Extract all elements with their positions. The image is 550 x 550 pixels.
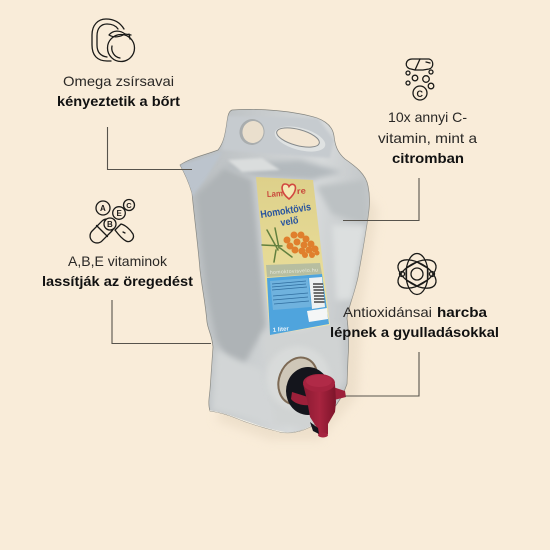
icon: vitamin pills: C (126, 201, 132, 210)
vitamin C bold line: citromban (392, 150, 464, 166)
vitamin text line: A,B,E vitaminok (68, 253, 168, 269)
antioxidant line 1: harcba (437, 304, 487, 320)
vitamin C line 2: vitamin, mint a (378, 130, 477, 146)
pouch body (180, 109, 369, 433)
product name: Homoktövis (260, 201, 312, 221)
icon: vitamin C fizz: C (416, 89, 424, 99)
label volume: 1 liter (273, 326, 290, 334)
brand heart (282, 184, 295, 199)
connector: vitamin C (343, 178, 419, 220)
icon: vitamin pills (87, 200, 134, 246)
omega line: Omega zsírsavai (63, 73, 174, 89)
vitamin bold line: lassítják az öregedést (42, 273, 193, 289)
product label (256, 177, 330, 335)
connector: vitamins (112, 300, 211, 344)
icon: vitamin pills: E (116, 209, 122, 218)
connector: omega (108, 127, 192, 170)
brand name right: re (297, 186, 306, 196)
product: juice pouch (180, 109, 369, 437)
icon: fruit capsule (92, 19, 134, 62)
barcode (313, 284, 324, 302)
label website: homoktovisvelo.hu (270, 267, 318, 276)
antioxidant line 1: Antioxidánsai (343, 304, 432, 320)
product name second line: velő (280, 215, 299, 229)
antioxidant line 1 (343, 304, 487, 320)
vitamin C line 1: 10x annyi C- (388, 109, 467, 125)
omega bold line: kényeztetik a bőrt (57, 93, 180, 109)
icon: vitamin pills: B (107, 220, 113, 229)
antioxidant bold line: lépnek a gyulladásokkal (330, 324, 499, 340)
icon: vitamin C fizz (406, 59, 434, 100)
icon: vitamin pills: A (100, 204, 106, 213)
connector: antioxidants (345, 352, 419, 396)
infographic canvas (43, 18, 498, 440)
pouch shadow (215, 170, 378, 440)
icon: atom (393, 254, 441, 294)
berry illustration (262, 228, 320, 262)
pouch wrinkles (180, 116, 368, 433)
spout tap (272, 352, 346, 438)
brand name left: Lam (267, 188, 283, 199)
handle holes (237, 116, 328, 156)
